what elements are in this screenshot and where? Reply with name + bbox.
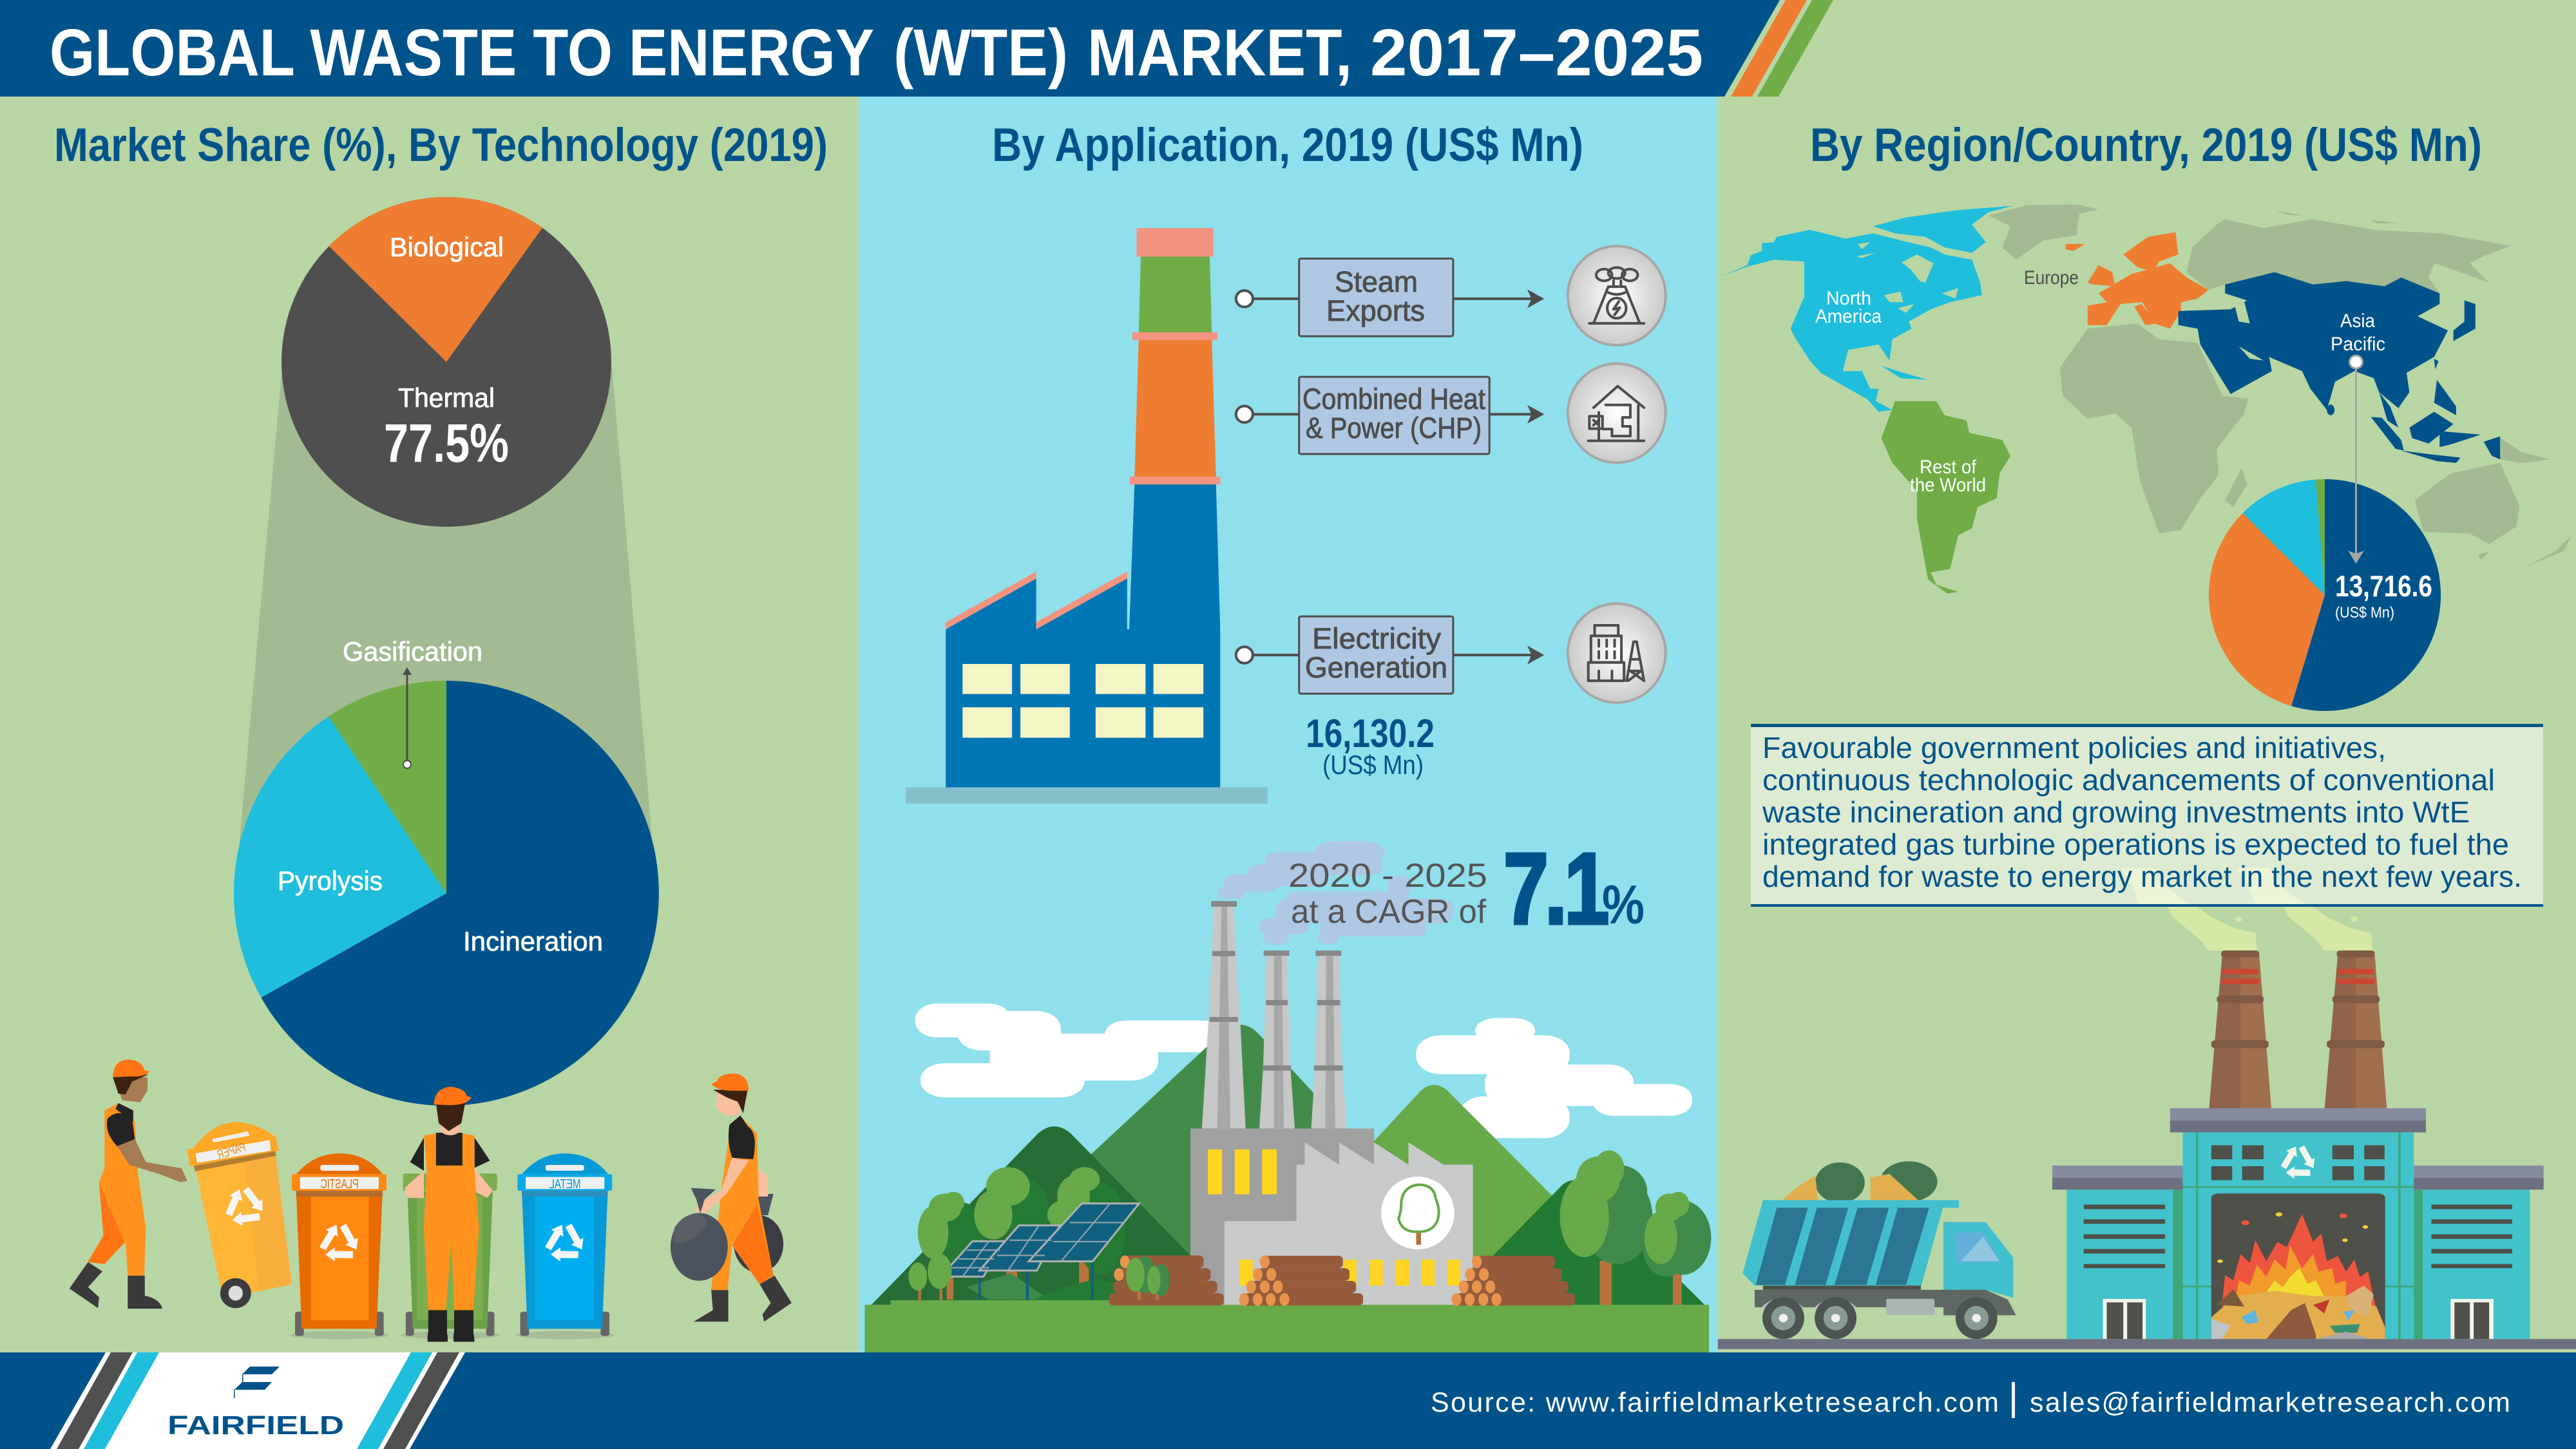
rest of the map (grey landmasses) [1989,204,2571,567]
region labels: Asia [2340,310,2375,332]
callout: steam exports: Exports [1326,294,1425,327]
furnace with fire and waste [2211,1193,2385,1339]
stat: CAGR: % [1602,875,1645,936]
contact details: sales@fairfieldmarketresearch.com [2030,1387,2510,1418]
pie chart: regional split [2209,479,2441,711]
worker carrying garbage bags [671,1074,792,1321]
icon: recycle symbols on bins [216,1185,584,1269]
callout: combined heat and power: & Power (CHP) [1306,412,1482,444]
world map [1720,204,2571,594]
text box: market drivers [1751,724,2543,907]
pie chart: technology split: Thermal [398,383,495,413]
callout: electricity generation: Generation [1305,651,1447,684]
solar panels [940,1204,1139,1300]
left trees [918,1167,1178,1300]
bin labels (mirrored): PLASTIC [321,1177,358,1191]
pie chart: technology split [281,197,611,527]
mountains [929,1025,1473,1305]
ground [865,1305,1709,1352]
stat: CAGR [1288,833,1645,945]
text box: market drivers: Favourable government policies and initiatives, [1762,731,2386,764]
worker pushing paper bin [70,1059,187,1309]
organic bin (green) [403,1173,497,1336]
text box: market drivers: continuous technologic advancements of conventional [1762,763,2495,797]
stat: application total [1306,712,1435,780]
header banner [0,0,1833,97]
South America [1881,401,2010,594]
metal bin (blue) [517,1153,612,1336]
garbage truck [1742,1161,2016,1339]
small bushes [908,1254,1170,1300]
pie chart: thermal breakdown: Incineration [463,926,603,956]
title: (WTE) [893,15,1068,90]
plastic bin (orange) [292,1153,386,1336]
stat: CAGR: 7.1 [1503,833,1609,945]
region labels [1815,267,2385,496]
Europe [2066,232,2209,328]
arrow: Asia Pacific to pie [2348,355,2364,564]
logo plate [50,1352,465,1449]
pie chart: thermal breakdown [234,636,659,1106]
callout: electricity generation [1236,603,1666,703]
icon: tree emblem [1381,1177,1455,1249]
stat: CAGR: at a CAGR of [1291,893,1487,931]
pie chart: technology split: 77.5% [384,413,509,473]
building [2052,1108,2544,1339]
paper bin (yellow, tilted) [187,1122,292,1308]
smoke [1218,841,1453,945]
illustration: power plant landscape [865,841,1711,1352]
pie chart: regional split: 13,716.6 [2335,569,2432,603]
title: 2017–2025 [1370,15,1703,90]
bin shadows [290,1331,615,1339]
region labels: the World [1910,475,1986,496]
arrow: gasification pointer [403,667,412,768]
text box: market drivers: demand for waste to energy market in the next few years. [1762,860,2522,893]
ground strip [1718,1339,2576,1349]
log piles [1109,1255,1575,1306]
factory with colour-coded chimney [906,228,1268,804]
heading: application: By Application, 2019 (US$ Mn) [992,119,1583,171]
icon: recycle symbol on plant [2276,1146,2314,1185]
illustration: waste-to-energy plant [1718,868,2576,1349]
text box: market drivers: integrated gas turbine operations is expected to fuel the [1762,828,2509,861]
logo wordmark: FAIRFIELD [167,1410,344,1440]
Asia Pacific [2179,272,2500,463]
bin labels (mirrored) [215,1140,580,1191]
region labels: Rest of [1920,457,1977,478]
smoke [2121,868,2372,951]
panel: by region/country [1718,97,2576,1352]
pie chart: thermal breakdown: Pyrolysis [278,866,383,896]
pie chart: thermal breakdown: Gasification [343,636,482,667]
region labels: North [1826,288,1871,309]
callout: steam exports [1236,246,1666,345]
region labels: Pacific [2331,334,2385,355]
stat: application total: 16,130.2 [1306,712,1435,756]
heading: technology: Market Share (%), By Technology (2019) [54,119,828,171]
pie chart: regional split: (US$ Mn) [2335,604,2394,621]
bin labels (mirrored): PAPER [215,1140,247,1162]
callout: electricity generation: Electricity [1312,622,1442,655]
panel: market share by technology [0,97,859,1352]
right trees [1560,1150,1711,1305]
clouds [915,1003,1692,1138]
contact details [1431,1382,2510,1418]
bin labels (mirrored): METAL [549,1177,581,1191]
title: MARKET, [1087,15,1352,90]
text box: market drivers: waste incineration and growing investments into WtE [1762,795,2470,829]
panel: by application [859,97,1718,1352]
title [50,15,1703,90]
North America [1720,205,2013,412]
worker seen from behind [405,1086,493,1341]
factory building [1190,1128,1374,1305]
title: GLOBAL WASTE TO ENERGY [50,15,874,90]
heading: region: By Region/Country, 2019 (US$ Mn) [1810,119,2482,171]
footer bar [0,1352,2576,1449]
region labels: Europe [2024,267,2079,289]
illustration: workers and recycling bins [70,1059,792,1341]
callout: combined heat and power [1236,363,1666,462]
callout: steam exports: Steam [1335,265,1418,298]
funnel connecting the two pies [236,366,656,882]
contact details: Source: www.fairfieldmarketresearch.com [1431,1387,1999,1418]
logo mark [234,1367,280,1398]
region labels: America [1815,306,1882,327]
stat: application total: (US$ Mn) [1322,750,1424,780]
chimneys [2209,951,2387,1108]
chimneys [1202,901,1347,1128]
callout: combined heat and power: Combined Heat [1302,383,1485,415]
stat: CAGR: 2020 - 2025 [1288,857,1487,895]
pie chart: technology split: Biological [390,232,504,262]
